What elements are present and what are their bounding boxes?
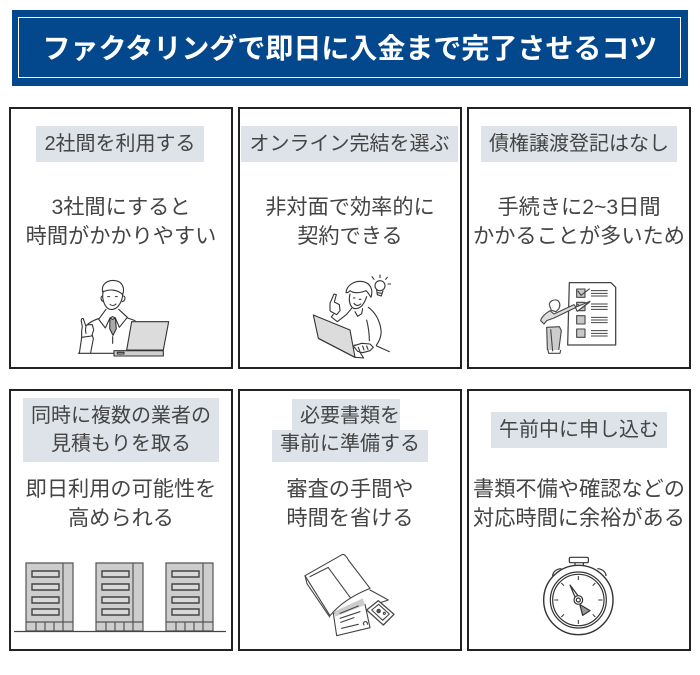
building 3 — [166, 563, 213, 631]
title banner — [12, 10, 688, 86]
panel: 2社間を利用する — [9, 107, 233, 369]
heading: 午前中に申し込む — [499, 419, 659, 441]
panel: 同時に複数の業者の見積もりを取る — [9, 389, 233, 651]
heading — [23, 398, 219, 462]
text block: 審査の手間や — [286, 478, 414, 501]
text block: 即日利用の可能性を — [26, 478, 216, 501]
building 2 — [96, 563, 143, 631]
text block: かかることが多いため — [473, 225, 685, 248]
heading: 債権譲渡登記はなし — [489, 133, 669, 155]
text block — [473, 478, 685, 530]
text block — [473, 196, 685, 248]
heading: 同時に複数の業者の — [31, 405, 211, 427]
text block: 対応時間に余裕がある — [473, 507, 685, 530]
heading — [241, 126, 458, 162]
heading: オンライン完結を選ぶ — [250, 133, 450, 155]
heading: 必要書類を — [300, 405, 400, 427]
text block: 手続きに2~3日間 — [497, 196, 661, 219]
heading: 事前に準備する — [280, 433, 420, 455]
text block: 非対面で効率的に — [265, 196, 435, 219]
icon: three buildings — [14, 562, 226, 632]
text block — [286, 478, 414, 530]
text block: 3社間にすると — [51, 196, 191, 219]
panel: 債権譲渡登記はなし — [467, 107, 691, 369]
text block — [265, 196, 435, 248]
heading: 2社間を利用する — [44, 133, 196, 155]
heading — [481, 126, 677, 162]
text block — [26, 196, 216, 248]
panel: 午前中に申し込む — [467, 389, 691, 651]
text block: 書類不備や確認などの — [473, 478, 685, 501]
heading — [491, 412, 667, 448]
icon: businessman at laptop — [78, 280, 170, 356]
building 1 — [26, 563, 73, 631]
icon: stopwatch — [542, 556, 614, 636]
heading: 見積もりを取る — [51, 433, 191, 455]
icon: person with laptop and light bulb — [312, 274, 392, 358]
heading — [36, 126, 204, 162]
text block: 時間がかかりやすい — [26, 225, 216, 248]
text block: 高められる — [68, 507, 174, 530]
text block — [26, 478, 216, 530]
icon: person pointing at checklist — [540, 282, 616, 354]
heading — [272, 399, 428, 462]
title: ファクタリングで即日に入金まで完了させるコツ — [43, 33, 657, 64]
panel: 必要書類を事前に準備する — [238, 389, 462, 651]
icon: envelope and documents — [304, 554, 395, 636]
text block: 時間を省ける — [286, 507, 414, 530]
panel: オンライン完結を選ぶ — [238, 107, 462, 369]
text block: 契約できる — [297, 225, 403, 248]
